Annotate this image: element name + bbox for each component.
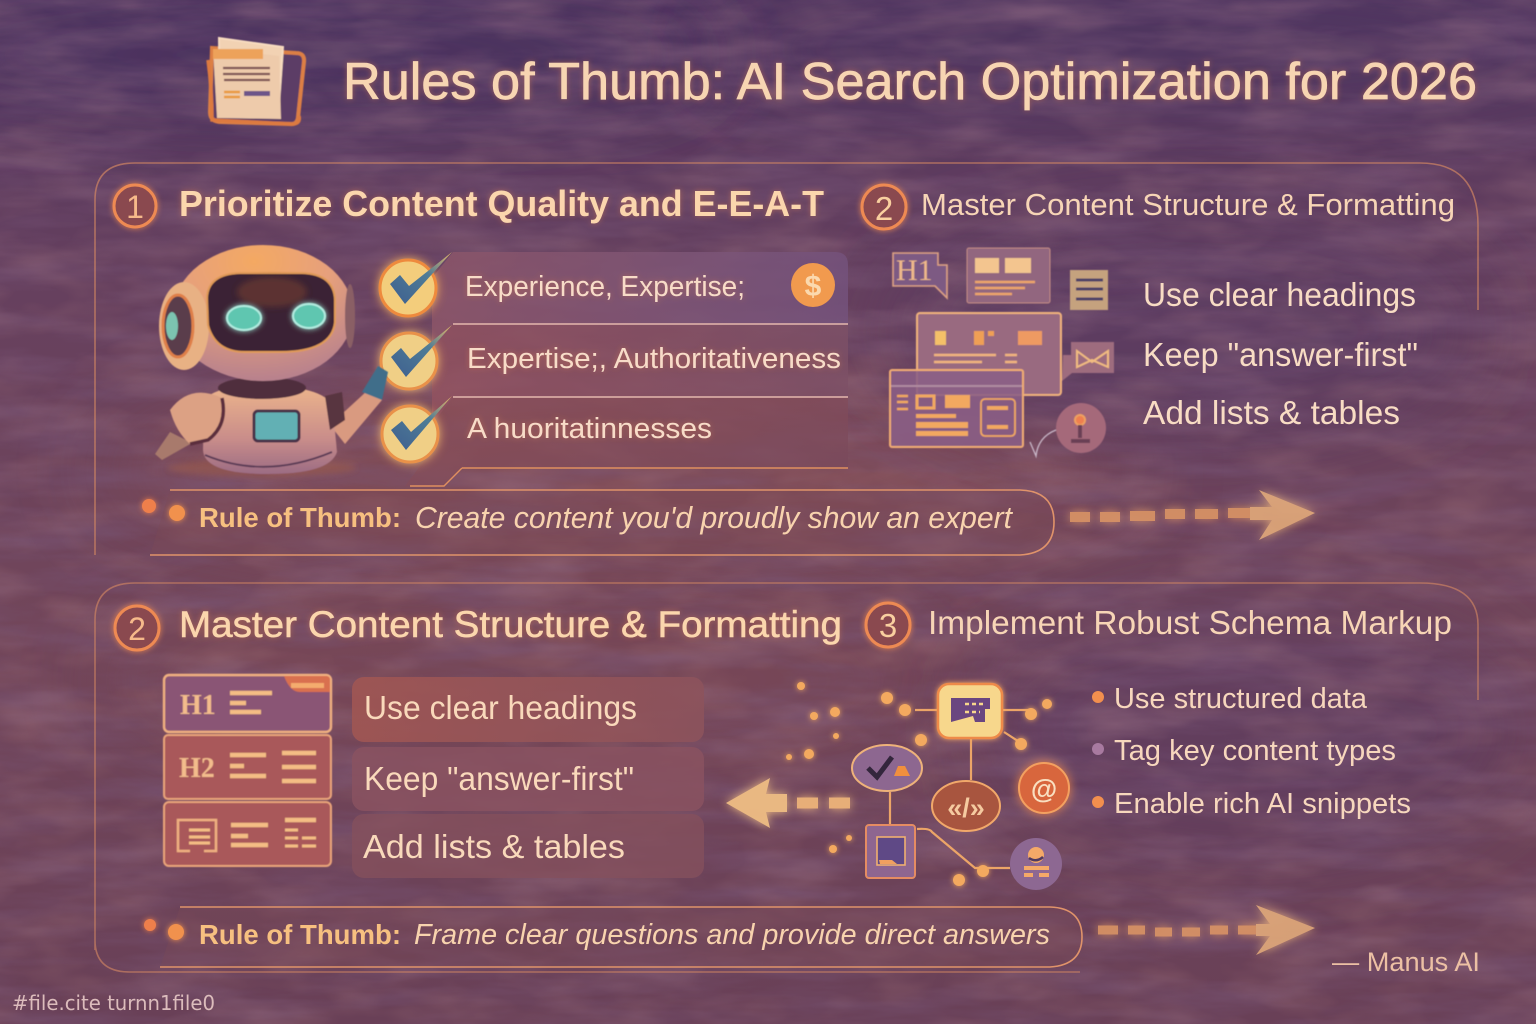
number badge 1: 1 <box>126 189 144 225</box>
icon: front card <box>890 370 1023 447</box>
structure text list: Use clear headings <box>1143 276 1416 313</box>
icon: document folder <box>208 38 304 124</box>
panel: bottom frame <box>95 583 1478 972</box>
pill: keep answer-first <box>352 747 704 811</box>
icon: table node <box>938 684 1002 738</box>
rule of thumb pill 1 <box>142 490 1054 555</box>
icon: image node <box>866 825 915 878</box>
icon: envelope <box>1062 342 1114 381</box>
icon: at badge: @ <box>1031 774 1057 804</box>
number badge 3: 3 <box>879 607 897 644</box>
section 3: schema markup <box>726 603 1452 890</box>
icon: H1 bubble: H1 <box>896 254 933 287</box>
schema bullet list: Tag key content types <box>1114 735 1396 767</box>
schema bullet list: Enable rich AI snippets <box>1114 788 1411 820</box>
icon: pin badge <box>1030 403 1106 456</box>
rule of thumb pill 2: Frame clear questions and provide direct answers <box>414 919 1050 951</box>
card text lines <box>465 271 841 445</box>
pill: add lists and tables <box>352 814 704 878</box>
structure text list <box>1143 276 1418 431</box>
rule of thumb pill 2: Rule of Thumb: <box>199 919 401 950</box>
citation footer: #file.cite turnn1file0 <box>12 991 215 1015</box>
rule of thumb pill 1: Create content you'd proudly show an expert <box>415 500 1013 535</box>
heading 3: Implement Robust Schema Markup <box>928 604 1452 641</box>
icon: heading stack: H1 <box>180 690 216 721</box>
icon: big card <box>917 313 1061 395</box>
icon: H1 bubble <box>893 253 947 298</box>
card text lines: A huoritatinnesses <box>467 413 712 445</box>
icon: person node <box>1010 838 1062 890</box>
arrow: right dashed 2 <box>1098 905 1315 955</box>
icon: menu <box>1070 270 1108 310</box>
section 2 (top right): content structure <box>862 185 1455 456</box>
panel: top frame <box>95 163 1478 555</box>
structure text list: Keep "answer-first" <box>1143 336 1418 373</box>
card text lines: Experience, Expertise; <box>465 271 745 303</box>
heading: Master Content Structure & Formatting <box>179 604 842 645</box>
attribution: — Manus AI <box>1332 947 1480 977</box>
section 2 (bottom left): content structure <box>115 604 1315 967</box>
arrow: right dashed 1 <box>1070 490 1315 540</box>
arrow: left dashed <box>726 778 850 828</box>
E-E-A-T card <box>405 252 848 486</box>
connectors <box>890 710 1030 868</box>
schema bullet list: Use structured data <box>1114 683 1368 715</box>
icon: document card <box>967 248 1050 303</box>
icon: heading stack <box>164 675 331 866</box>
icon: coin: $ <box>805 270 822 303</box>
pill: keep answer-first: Keep "answer-first" <box>364 760 634 797</box>
layout icons <box>890 248 1114 456</box>
number badge 1 <box>114 185 156 227</box>
structure text list: Add lists & tables <box>1143 394 1400 431</box>
icon: robot <box>155 245 388 477</box>
rule of thumb pill 1: Rule of Thumb: <box>199 502 401 533</box>
icon: code node: «/» <box>947 793 985 823</box>
glowing nodes <box>786 682 1052 886</box>
section 1: prioritize content quality <box>114 183 1315 555</box>
icon: check node <box>852 745 922 791</box>
number badge 2: 2 <box>128 611 146 647</box>
heading 1: Prioritize Content Quality and E-E-A-T <box>179 183 824 224</box>
icon: coin <box>791 263 835 307</box>
schema network diagram <box>786 682 1069 890</box>
title: Rules of Thumb: AI Search Optimization for 2026 <box>343 53 1477 111</box>
heading 2: Master Content Structure & Formatting <box>921 187 1455 222</box>
number badge 2: 2 <box>875 190 893 227</box>
pill: use clear headings <box>352 677 704 742</box>
number badge 2 <box>115 606 159 650</box>
check badges <box>380 252 452 462</box>
icon: at badge <box>1019 763 1069 813</box>
icon: code node <box>932 781 1000 831</box>
icon: heading stack: H2 <box>179 753 215 784</box>
pill: add lists and tables: Add lists & tables <box>363 828 625 865</box>
card text lines: Expertise;, Authoritativeness <box>467 343 841 375</box>
schema bullet list <box>1092 683 1411 820</box>
rule of thumb pill 2 <box>144 907 1082 967</box>
number badge 3 <box>866 603 910 647</box>
pill: use clear headings: Use clear headings <box>364 689 637 726</box>
number badge 2 <box>862 185 906 229</box>
